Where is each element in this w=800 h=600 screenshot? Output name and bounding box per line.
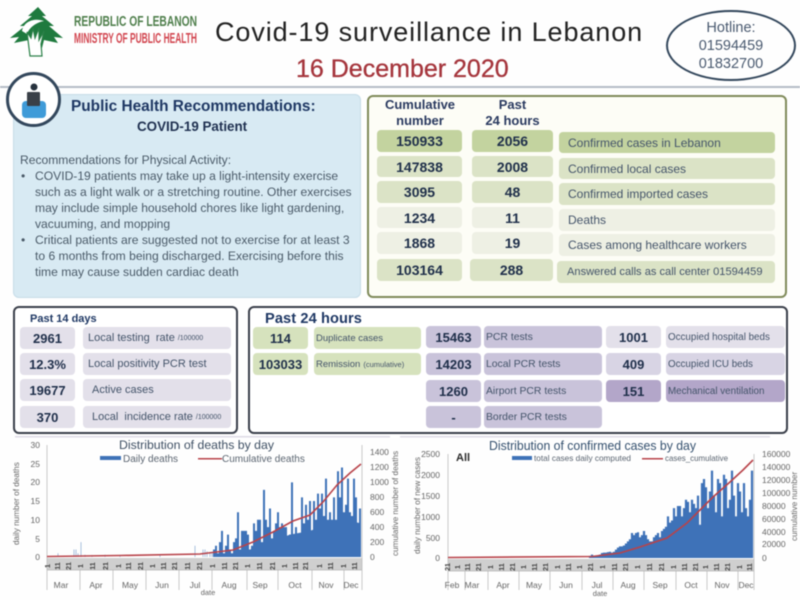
row: cases among healthcare workers: 19 bbox=[505, 235, 520, 251]
text block: physical activity recommendations: Recommendations for Physical Activity: bbox=[20, 153, 231, 167]
right axis labels: cumulative deaths: 200 bbox=[370, 537, 384, 547]
row: duplicate cases: Duplicate cases bbox=[316, 332, 383, 344]
date ticks: 21 bbox=[138, 562, 145, 570]
hotline oval: 01594459 bbox=[699, 38, 763, 54]
axis title: daily number of deaths: daily number of deaths bbox=[12, 462, 21, 545]
row: local positivity: Local positivity PCR test bbox=[88, 358, 207, 370]
date ticks: 21 bbox=[103, 562, 110, 570]
left axis labels: daily cases: 1000 bbox=[421, 512, 440, 522]
row: active cases: Active cases bbox=[92, 384, 154, 396]
row: local incidence rate bbox=[20, 406, 232, 428]
panel: past 14 days bbox=[13, 306, 238, 434]
header divider line bbox=[0, 86, 800, 88]
date ticks: 1 bbox=[703, 565, 710, 569]
line: cumulative deaths bbox=[47, 464, 361, 556]
month labels: Jun bbox=[155, 580, 169, 590]
month labels: Sep bbox=[252, 580, 268, 590]
date ticks: 1 bbox=[282, 564, 289, 568]
date ticks: 11 bbox=[222, 562, 229, 570]
bars: daily deaths bbox=[58, 467, 361, 557]
date ticks: 11 bbox=[90, 562, 97, 570]
label: All: All bbox=[456, 452, 470, 464]
right axis labels: cumulative cases: 160000 bbox=[762, 449, 791, 459]
month labels: Feb bbox=[445, 580, 460, 590]
date ticks: 11 bbox=[647, 563, 654, 571]
date ticks: 11 bbox=[55, 562, 62, 570]
text block: physical activity recommendations: such as a light walk or a stretching routine. Other exercises bbox=[35, 185, 352, 199]
left axis labels: daily deaths: 20 bbox=[31, 477, 40, 487]
text block: physical activity recommendations: Critical patients are suggested not to exercise for at least 3 bbox=[35, 233, 350, 247]
right axis labels: cumulative deaths: 1400 bbox=[370, 447, 389, 457]
row: PCR tests bbox=[426, 326, 602, 348]
row: mechanical ventilation: 151 bbox=[623, 384, 644, 398]
row: confirmed cases in Lebanon: Confirmed cases in Lebanon bbox=[568, 136, 721, 150]
row: border PCR tests bbox=[426, 406, 602, 428]
left axis labels: daily cases: 0 bbox=[435, 553, 440, 563]
date ticks: 21 bbox=[623, 563, 630, 571]
row: confirmed cases in Lebanon: 150933 bbox=[396, 133, 443, 149]
column heading: past 24 hours bbox=[485, 97, 540, 128]
text block: physical activity recommendations: vacuuming, and mopping bbox=[35, 217, 170, 231]
month labels: date bbox=[201, 588, 215, 597]
panel: past 24 hours bbox=[248, 306, 788, 434]
left axis labels: daily cases bbox=[421, 449, 440, 563]
legend: deaths: Daily deaths bbox=[123, 454, 178, 465]
date ticks: 21 bbox=[197, 562, 204, 570]
date ticks: 1 bbox=[488, 565, 495, 569]
date ticks: 11 bbox=[161, 562, 168, 570]
text block: physical activity recommendations: • bbox=[21, 169, 25, 183]
date ticks: 1 bbox=[577, 565, 584, 569]
left axis labels: daily deaths: 30 bbox=[31, 440, 40, 450]
text block: physical activity recommendations bbox=[20, 153, 352, 280]
date ticks: 11 bbox=[612, 563, 619, 571]
right axis labels: cumulative cases: 40000 bbox=[762, 527, 786, 537]
text block: physical activity recommendations: to 6 months from being discharged. Exercising before this bbox=[35, 249, 344, 263]
left axis labels: daily cases: 500 bbox=[426, 533, 440, 543]
date ticks: 11 bbox=[293, 562, 300, 570]
month labels: Mar bbox=[465, 580, 479, 590]
row: confirmed imported cases: 48 bbox=[505, 184, 520, 200]
logo: Ministry of Public Health bbox=[10, 6, 198, 58]
row: deaths bbox=[377, 207, 775, 231]
column heading: cumulative number bbox=[384, 97, 456, 128]
right axis labels: cumulative cases: 80000 bbox=[762, 501, 786, 511]
row: local incidence rate: /100000 bbox=[196, 414, 221, 420]
right axis labels: cumulative cases: 140000 bbox=[762, 462, 791, 472]
month labels: Mar bbox=[54, 580, 68, 590]
date ticks: 1 bbox=[555, 565, 562, 569]
column heading: cumulative number: number bbox=[396, 113, 444, 128]
row: airport PCR tests: Airport PCR tests bbox=[486, 386, 566, 396]
left axis labels: daily deaths: 0 bbox=[35, 552, 40, 562]
date ticks: 1 bbox=[210, 564, 217, 568]
row: PCR tests: 15463 bbox=[435, 330, 472, 344]
date ticks: 11 bbox=[328, 562, 335, 570]
legend: cases: total cases daily computed bbox=[534, 454, 631, 463]
row: occupied ICU beds bbox=[606, 352, 786, 376]
row: airport PCR tests bbox=[426, 380, 602, 402]
row: mechanical ventilation: Mechanical ventilation bbox=[668, 386, 764, 396]
date ticks: 1 bbox=[317, 564, 324, 568]
row: confirmed local cases: 2008 bbox=[497, 158, 528, 174]
right axis labels: cumulative cases: 120000 bbox=[762, 475, 791, 485]
month labels: Aug bbox=[221, 580, 237, 590]
date ticks: 1 bbox=[671, 565, 678, 569]
row: confirmed cases in Lebanon bbox=[376, 130, 776, 154]
month labels: Nov bbox=[714, 580, 730, 590]
left axis labels: daily cases: 1500 bbox=[421, 491, 440, 501]
row: confirmed cases in Lebanon: 2056 bbox=[497, 133, 528, 149]
month labels: May bbox=[526, 580, 543, 590]
month labels: Oct bbox=[288, 580, 302, 590]
row: PCR tests: PCR tests bbox=[486, 332, 533, 342]
date ticks: 21 bbox=[270, 562, 277, 570]
row: deaths: 1234 bbox=[404, 210, 435, 226]
bars: daily cases bbox=[590, 471, 752, 558]
row: answered calls bbox=[376, 258, 776, 284]
date ticks: 11 bbox=[747, 563, 754, 571]
row: confirmed imported cases bbox=[376, 180, 776, 206]
month labels: Dec bbox=[738, 580, 754, 590]
row: occupied hospital beds: Occupied hospital beds bbox=[668, 332, 770, 342]
chart: distribution of deaths by day bbox=[12, 436, 400, 597]
date ticks bbox=[445, 563, 754, 571]
date ticks: 21 bbox=[659, 563, 666, 571]
row: remission bbox=[252, 352, 422, 376]
left axis labels: daily deaths: 10 bbox=[31, 515, 40, 525]
row: remission: (cumulative) bbox=[363, 360, 404, 368]
row: border PCR tests: Border PCR tests bbox=[486, 412, 567, 422]
month labels: Oct bbox=[684, 580, 698, 590]
date ticks: 21 bbox=[66, 562, 73, 570]
right axis labels: cumulative deaths: 800 bbox=[370, 492, 384, 502]
row: active cases: 19677 bbox=[29, 382, 66, 398]
month labels bbox=[445, 580, 754, 598]
date ticks: 1 bbox=[455, 565, 462, 569]
row: local PCR tests bbox=[426, 352, 602, 376]
row: border PCR tests: - bbox=[451, 410, 456, 424]
text block: physical activity recommendations: COVID-19 patients may take up a light-intensity exercise bbox=[35, 169, 338, 183]
date ticks: 11 bbox=[566, 563, 573, 571]
date ticks: 21 bbox=[543, 563, 550, 571]
row: local positivity bbox=[20, 352, 232, 376]
date ticks: 21 bbox=[233, 562, 240, 570]
heading: recommendations: Public Health Recommendations: bbox=[71, 98, 316, 115]
right axis labels: cumulative cases: 20000 bbox=[762, 539, 786, 549]
row: deaths: 11 bbox=[505, 210, 520, 226]
date ticks: 11 bbox=[185, 562, 192, 570]
panel: cumulative and 24 hour figures bbox=[367, 95, 787, 298]
axis title: daily number of new cases: daily number of new cases bbox=[413, 457, 422, 554]
row: answered calls: 288 bbox=[500, 262, 523, 278]
date ticks: 1 bbox=[116, 564, 123, 568]
row: confirmed imported cases: Confirmed imported cases bbox=[568, 187, 708, 201]
month labels: Aug bbox=[620, 580, 636, 590]
date ticks: 11 bbox=[465, 563, 472, 571]
row: active cases bbox=[20, 378, 232, 402]
column heading: past 24 hours: 24 hours bbox=[485, 113, 540, 128]
row: occupied hospital beds: 1001 bbox=[619, 330, 648, 344]
row: local incidence rate: Local incidence rate bbox=[92, 411, 193, 423]
left axis labels: daily cases: 2500 bbox=[421, 449, 440, 459]
left axis labels: daily deaths bbox=[31, 440, 40, 562]
column heading: past 24 hours: Past bbox=[499, 97, 526, 112]
date ticks: 21 bbox=[476, 563, 483, 571]
month labels: date bbox=[593, 589, 607, 598]
date ticks: 21 bbox=[588, 563, 595, 571]
legend: deaths bbox=[100, 454, 305, 465]
month labels: Jul bbox=[592, 580, 603, 590]
month labels: Jul bbox=[190, 580, 201, 590]
axes and date band bbox=[47, 445, 362, 590]
date ticks: 1 bbox=[600, 565, 607, 569]
month labels: Sep bbox=[652, 580, 668, 590]
date ticks: 21 bbox=[725, 563, 732, 571]
row: answered calls: Answered calls as call center 01594459 bbox=[567, 266, 762, 278]
heading: past 14 days: Past 14 days bbox=[30, 313, 97, 325]
row: confirmed local cases: Confirmed local cases bbox=[568, 162, 686, 176]
hotline oval: 01832700 bbox=[699, 56, 763, 72]
row: remission: Remission bbox=[316, 358, 360, 370]
date ticks: 11 bbox=[532, 563, 539, 571]
date ticks: 1 bbox=[150, 564, 157, 568]
row: local testing rate: 2961 bbox=[33, 330, 62, 346]
date ticks: 1 bbox=[45, 564, 52, 568]
date ticks: 1 bbox=[737, 565, 744, 569]
legend: cases bbox=[512, 454, 728, 463]
date ticks: 11 bbox=[126, 562, 133, 570]
row: duplicate cases: 114 bbox=[270, 330, 291, 346]
row: deaths: Deaths bbox=[568, 213, 606, 227]
date ticks: 1 bbox=[245, 564, 252, 568]
row: occupied ICU beds: 409 bbox=[623, 356, 644, 372]
axis title: cumulative number: cumulative number bbox=[790, 472, 799, 541]
axis title: cumulative number of deaths: cumulative number of deaths bbox=[391, 451, 400, 556]
sub-heading: COVID-19 patient: COVID-19 Patient bbox=[137, 119, 247, 134]
date ticks: 21 bbox=[693, 563, 700, 571]
month labels: Dec bbox=[343, 580, 359, 590]
date ticks: 21 bbox=[510, 563, 517, 571]
date ticks: 1 bbox=[635, 565, 642, 569]
row: mechanical ventilation bbox=[606, 380, 786, 402]
left axis labels: daily cases: 2000 bbox=[421, 470, 440, 480]
date ticks: 21 bbox=[303, 562, 310, 570]
row: occupied hospital beds bbox=[606, 326, 786, 348]
right axis labels: cumulative deaths: 0 bbox=[370, 552, 375, 562]
row: cases among healthcare workers bbox=[377, 232, 775, 256]
date ticks: 11 bbox=[682, 563, 689, 571]
right axis labels: cumulative cases bbox=[762, 449, 791, 563]
date ticks: 11 bbox=[714, 563, 721, 571]
title: Covid-19 surveillance in Lebanon bbox=[215, 17, 643, 47]
text block: physical activity recommendations: • bbox=[21, 233, 25, 247]
axes and date band bbox=[448, 454, 754, 590]
month labels: Apr bbox=[496, 580, 510, 590]
row: confirmed local cases: 147838 bbox=[396, 158, 443, 174]
left axis labels: daily deaths: 25 bbox=[31, 459, 40, 469]
text block: physical activity recommendations: time may cause sudden cardiac death bbox=[35, 265, 239, 279]
date ticks: 11 bbox=[499, 563, 506, 571]
month labels: Apr bbox=[89, 580, 103, 590]
chart title: deaths: Distribution of deaths by day bbox=[119, 438, 275, 452]
row: answered calls: 103164 bbox=[396, 262, 443, 278]
right axis labels: cumulative deaths: 1200 bbox=[370, 462, 389, 472]
right axis labels: cumulative cases: 60000 bbox=[762, 514, 786, 524]
date ticks: 1 bbox=[341, 564, 348, 568]
date: 16 December 2020 bbox=[296, 55, 509, 83]
row: local testing rate bbox=[20, 326, 232, 350]
right axis labels: cumulative deaths bbox=[370, 447, 389, 562]
row: cases among healthcare workers: 1868 bbox=[404, 235, 435, 251]
row: local PCR tests: 14203 bbox=[435, 356, 472, 372]
date ticks: 11 bbox=[257, 562, 264, 570]
right axis labels: cumulative cases: 0 bbox=[762, 553, 767, 563]
chart: distribution of confirmed cases by day bbox=[400, 436, 799, 598]
legend: deaths: Cumulative deaths bbox=[222, 454, 305, 465]
right axis labels: cumulative cases: 100000 bbox=[762, 488, 791, 498]
date ticks: 21 bbox=[172, 562, 179, 570]
line: cumulative cases bbox=[448, 460, 753, 558]
row: local incidence rate: 370 bbox=[37, 410, 58, 424]
right axis labels: cumulative deaths: 400 bbox=[370, 522, 384, 532]
month labels: Nov bbox=[318, 580, 334, 590]
row: duplicate cases bbox=[252, 326, 422, 350]
right axis labels: cumulative deaths: 600 bbox=[370, 507, 384, 517]
row: cases among healthcare workers: Cases among healthcare workers bbox=[568, 238, 747, 252]
row: local testing rate: Local testing rate bbox=[88, 332, 175, 344]
row: confirmed local cases bbox=[376, 156, 776, 180]
date ticks: 21 bbox=[445, 563, 452, 571]
month labels: May bbox=[122, 580, 139, 590]
row: confirmed imported cases: 3095 bbox=[404, 184, 435, 200]
row: local PCR tests: Local PCR tests bbox=[486, 358, 560, 370]
month labels: Jun bbox=[559, 580, 573, 590]
hotline oval bbox=[666, 10, 796, 81]
month labels bbox=[54, 580, 359, 597]
icon: patient in circle bbox=[6, 72, 61, 127]
chart title: confirmed cases: Distribution of confirmed cases by day bbox=[489, 438, 696, 453]
row: local positivity: 12.3% bbox=[29, 356, 66, 372]
right axis labels: cumulative deaths: 1000 bbox=[370, 477, 389, 487]
icon: cedar tree bbox=[10, 7, 63, 56]
left axis labels: daily deaths: 15 bbox=[31, 496, 40, 506]
row: airport PCR tests: 1260 bbox=[439, 384, 468, 398]
text block: physical activity recommendations: may include simple household chores like light gardening, bbox=[35, 201, 344, 215]
date ticks bbox=[45, 562, 359, 570]
date ticks: 11 bbox=[352, 562, 359, 570]
hotline oval: Hotline: bbox=[706, 20, 756, 36]
date ticks: 1 bbox=[78, 564, 85, 568]
panel: public health recommendations bbox=[13, 94, 361, 298]
row: local testing rate: /100000 bbox=[178, 334, 203, 342]
column heading: cumulative number: Cumulative bbox=[385, 97, 455, 112]
date ticks: 1 bbox=[521, 565, 528, 569]
heading: past 24 hours: Past 24 hours bbox=[265, 311, 362, 327]
legend: cases: cases_cumulative bbox=[665, 454, 728, 463]
row: remission: 103033 bbox=[259, 356, 302, 372]
left axis labels: daily deaths: 5 bbox=[35, 534, 40, 544]
row: occupied ICU beds: Occupied ICU beds bbox=[668, 358, 753, 370]
